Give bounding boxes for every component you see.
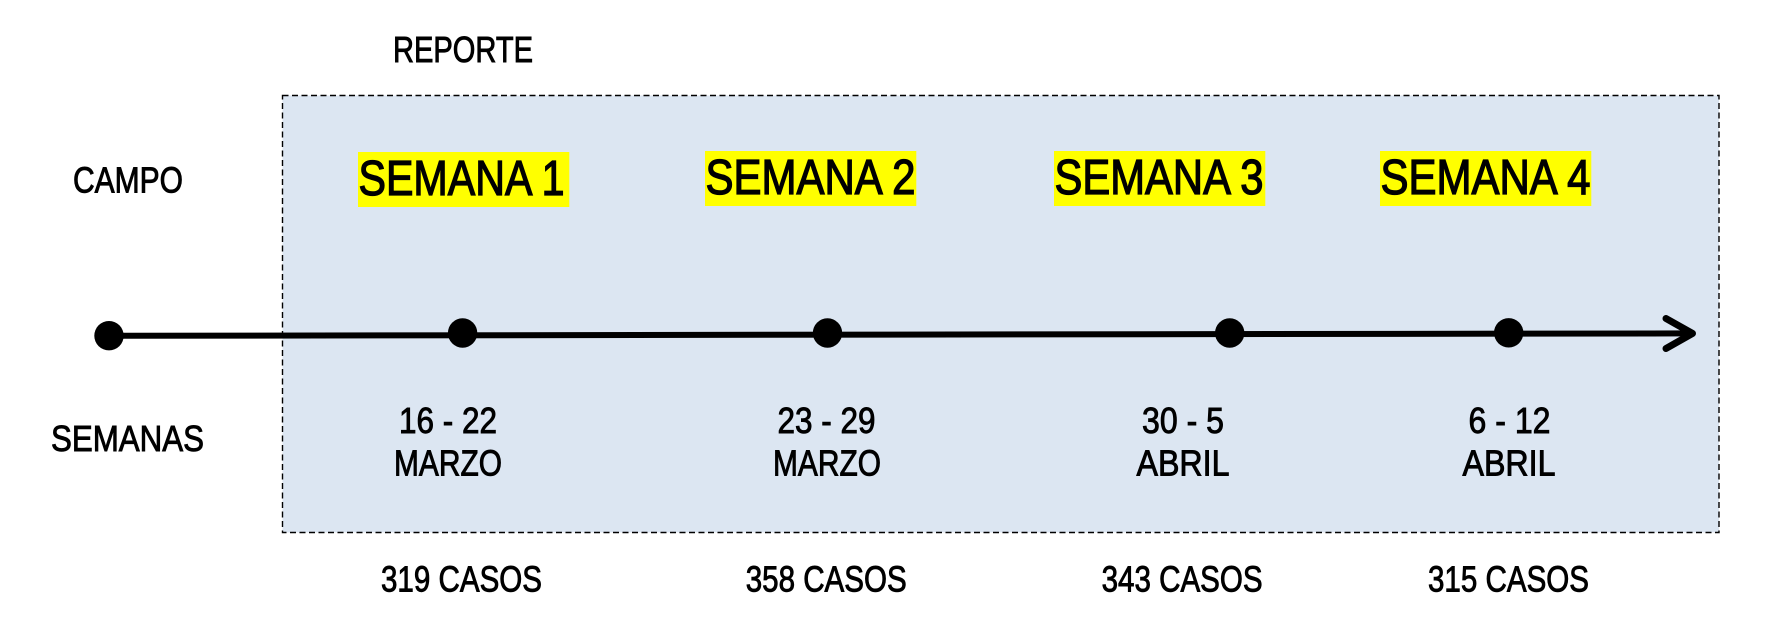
heading: reporte: REPORTE	[393, 29, 533, 70]
dates: week 4: 6 - 12	[1468, 400, 1550, 441]
dates: week 1	[394, 400, 502, 484]
highlight: semana 4	[1380, 151, 1591, 206]
dates: week 2: 23 - 29	[778, 400, 876, 441]
timeline point: week 2	[813, 318, 842, 348]
dates: week 3	[1136, 400, 1230, 484]
dates: week 4	[1462, 400, 1556, 484]
heading: semana 1: SEMANA 1	[358, 152, 564, 206]
timeline arrow	[109, 318, 1692, 348]
cases: week 2: 358 CASOS	[746, 558, 907, 599]
cases: week 1: 319 CASOS	[381, 558, 542, 599]
cases: week 4: 315 CASOS	[1428, 558, 1589, 599]
dates: week 3: ABRIL	[1136, 442, 1230, 484]
timeline start point	[94, 321, 124, 350]
dates: week 2	[773, 400, 881, 484]
heading: semana 4: SEMANA 4	[1380, 151, 1590, 205]
dates: week 1: MARZO	[394, 442, 502, 484]
heading: semana 3: SEMANA 3	[1054, 151, 1264, 205]
highlight: semana 3	[1054, 151, 1265, 206]
highlight: semana 1	[358, 152, 569, 207]
panel: report area	[282, 96, 1719, 532]
timeline point: week 4	[1494, 318, 1523, 347]
timeline point: week 3	[1215, 318, 1244, 348]
dates: week 2: MARZO	[773, 442, 881, 484]
heading: semana 2: SEMANA 2	[706, 151, 916, 205]
label: campo: CAMPO	[73, 160, 183, 200]
timeline point: week 1	[448, 318, 477, 348]
dates: week 1: 16 - 22	[399, 400, 497, 441]
cases: week 3: 343 CASOS	[1102, 558, 1263, 599]
highlight: semana 2	[705, 151, 916, 206]
label: semanas: SEMANAS	[51, 418, 204, 459]
dates: week 4: ABRIL	[1462, 442, 1556, 484]
dates: week 3: 30 - 5	[1142, 400, 1224, 441]
